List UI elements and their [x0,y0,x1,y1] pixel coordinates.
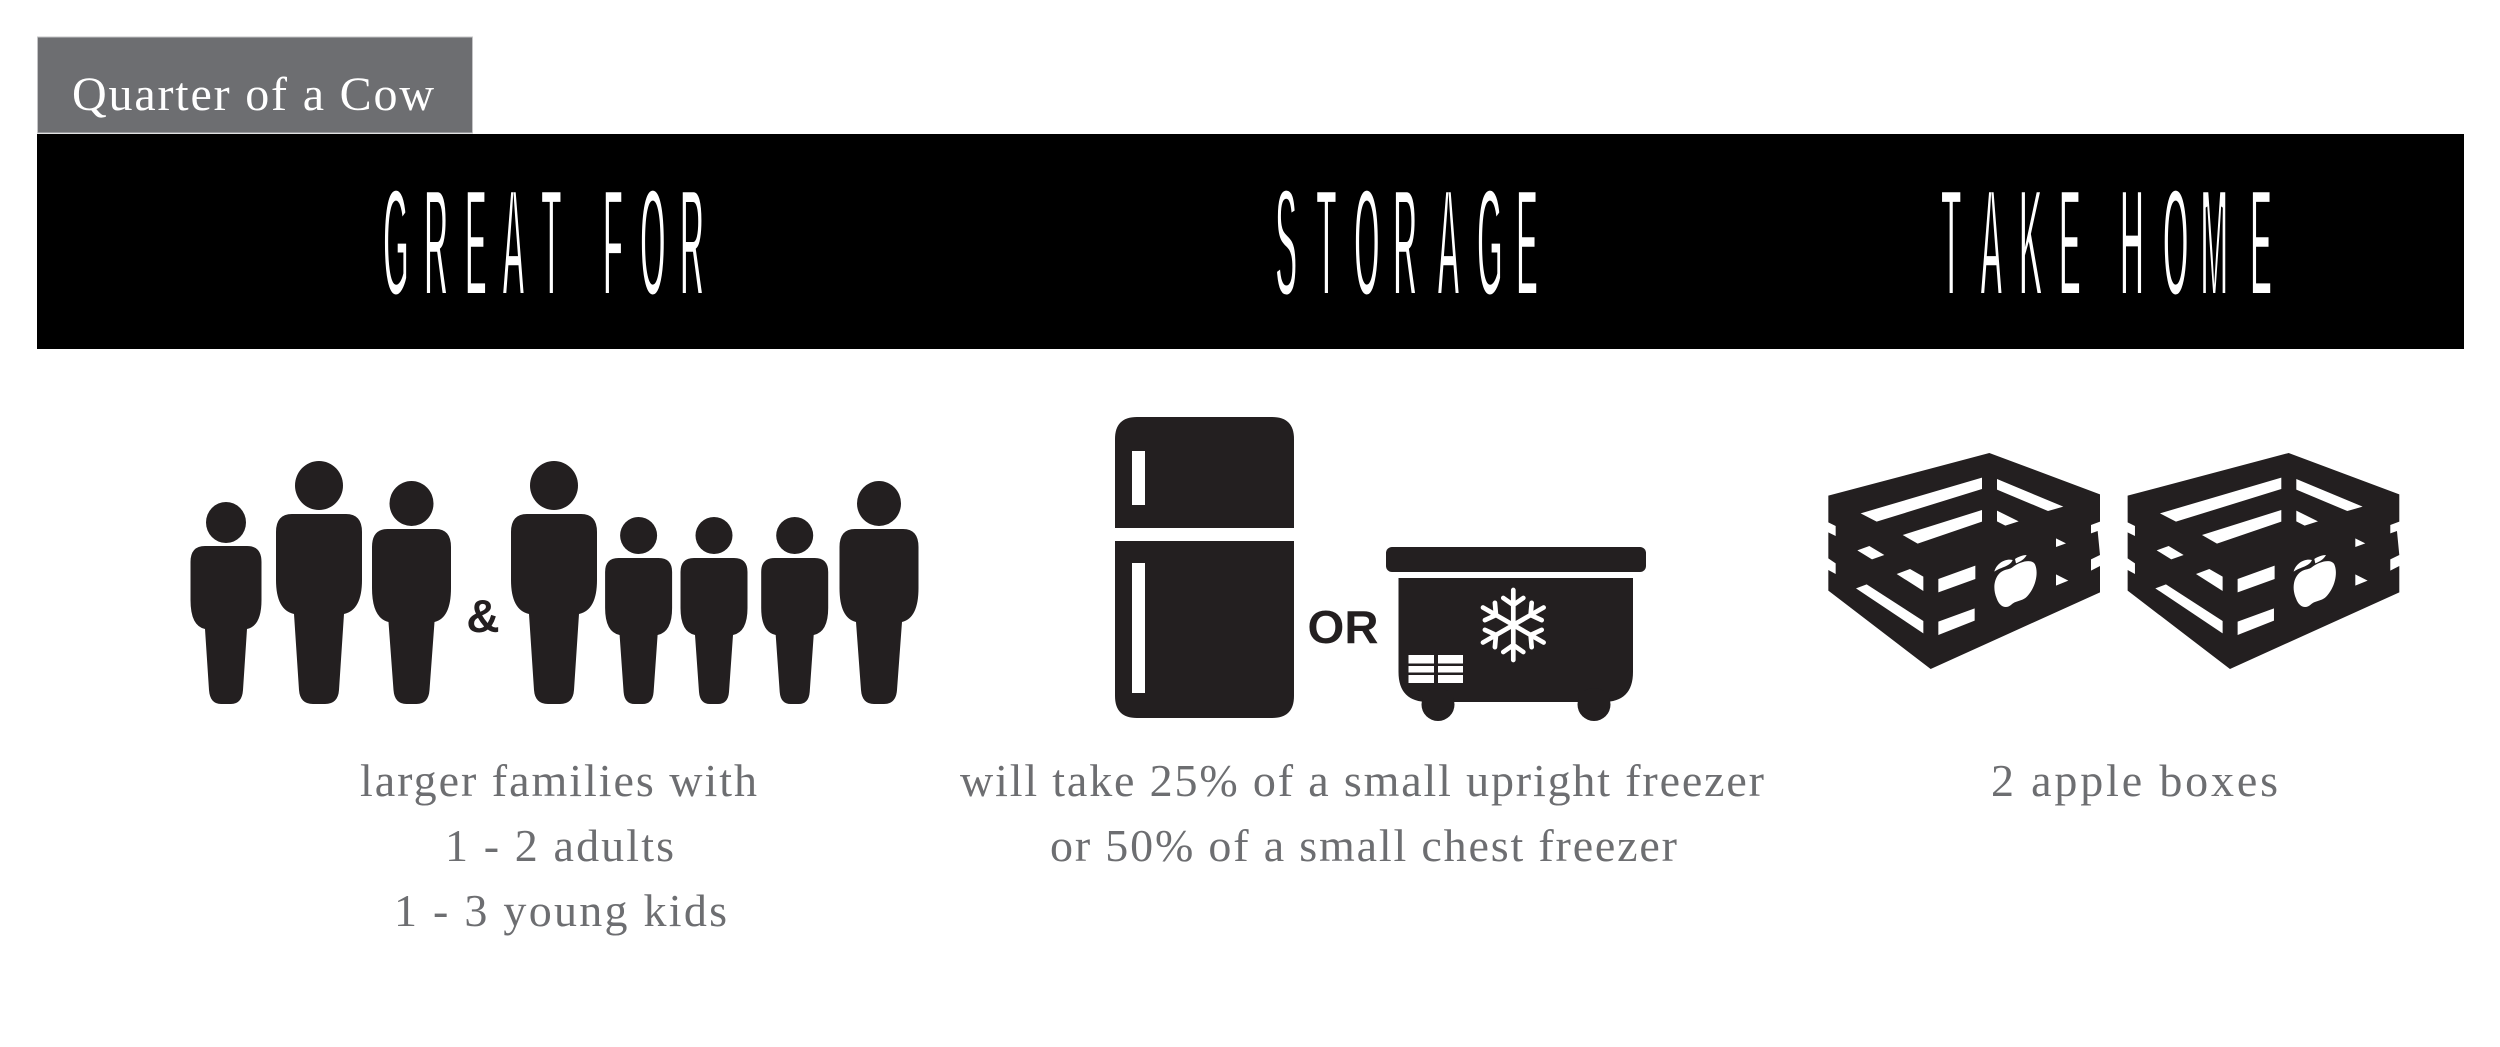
text: great for description: larger families with [360,755,757,806]
header band [37,134,2464,349]
tab: Quarter of a Cow [38,37,472,133]
person: group 2 [511,461,918,704]
text: storage description: will take 25% of a small upright freezer [960,755,1764,806]
label: OR: OR [1308,601,1378,653]
vent grille [1408,655,1463,683]
text: storage description [960,755,1764,871]
tab: Quarter of a Cow: Quarter of a Cow [72,68,434,121]
heading: Great For: GREAT FOR [383,156,704,332]
text: great for description: 1 - 3 young kids [394,885,727,936]
icon: snowflake [1478,590,1549,660]
icon: apple box 2 [2128,453,2399,669]
text: great for description: 1 - 2 adults [445,820,674,871]
heading: Take Home: TAKE HOME [1941,156,2272,332]
icon: chest freezer [1386,547,1646,721]
heading: Storage: STORAGE [1275,156,1538,332]
text: great for description [360,755,757,936]
text: storage description: or 50% of a small chest freezer [1050,820,1677,871]
text: take home description: 2 apple boxes [1991,755,2278,806]
icon: upright freezer [1115,417,1294,718]
icon: apple box 1 [1828,453,2100,669]
person: adult group 1 [190,461,451,704]
ampersand: & [466,590,500,642]
icon: family of adults and kids [190,461,918,704]
